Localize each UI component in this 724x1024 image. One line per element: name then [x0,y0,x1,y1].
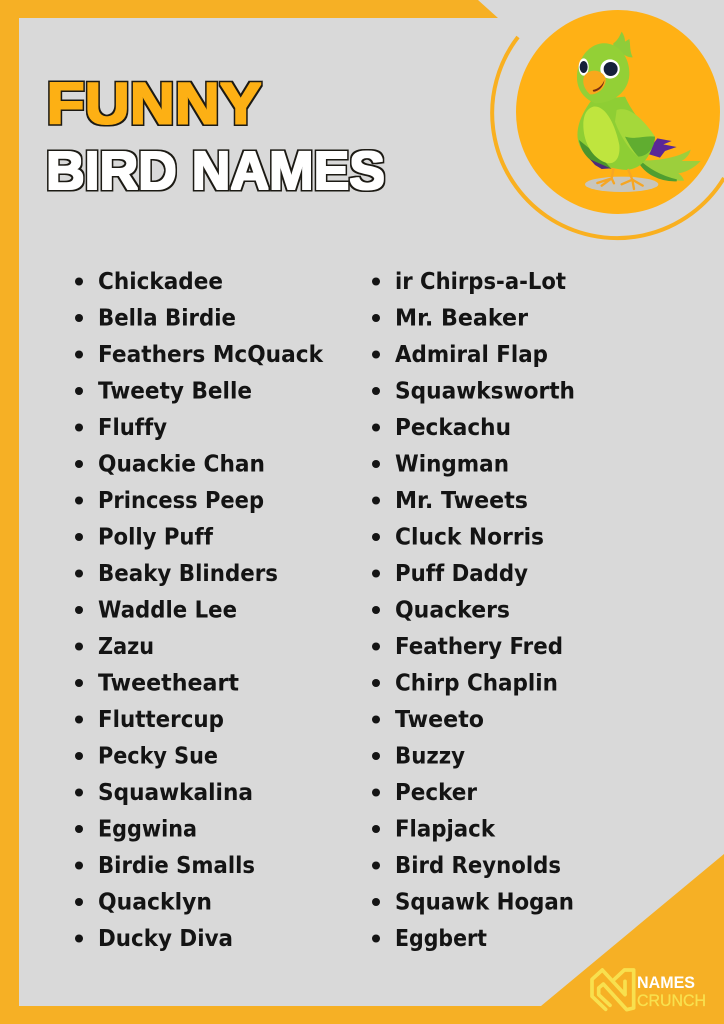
names: left column: Waddle Lee [98,598,237,624]
names: right column: Mr. Beaker [395,306,529,332]
names: right column: Cluck Norris [395,524,544,550]
names: right column: Pecker [395,780,478,806]
icon: N logo mark [592,970,634,1010]
names: right column: Squawksworth [395,378,575,404]
names: right column: Quackers [395,598,510,624]
title [46,72,385,201]
names: left column: Birdie Smalls [98,853,255,879]
bullets: left column [75,278,83,942]
right column of names [372,269,575,952]
title line: Funny: FUNNY [46,72,262,136]
names: right column: Peckachu [395,415,511,441]
names: left column: Tweetheart [98,670,239,696]
names: right column: Bird Reynolds [395,853,561,879]
names: right column: Mr. Tweets [395,488,528,514]
names: right column: Chirp Chaplin [395,670,558,696]
names: right column: ir Chirps-a-Lot [395,269,566,295]
title line: Bird Names: BIRD NAMES [46,141,385,201]
names: left column: Tweety Belle [98,378,252,404]
names: left column: Beaky Blinders [98,561,278,587]
names: left column: Ducky Diva [98,926,233,952]
names: left column: Polly Puff [98,524,214,550]
names: right column [395,269,575,952]
names: right column: Puff Daddy [395,561,528,587]
names: left column: Fluffy [98,415,167,441]
decorative ring arc [492,37,724,238]
names: right column: Admiral Flap [395,342,548,368]
logo text: Names: NAMES [637,973,695,992]
names: left column: Eggwina [98,816,197,842]
names: left column: Pecky Sue [98,744,218,770]
names: left column: Squawkalina [98,780,253,806]
names: left column: Bella Birdie [98,306,236,332]
logo: Names Crunch [592,970,706,1010]
names: right column: Wingman [395,452,509,478]
names: left column: Chickadee [98,269,223,295]
names: left column: Quacklyn [98,890,212,916]
names: left column: Fluttercup [98,707,224,733]
names: left column: Quackie Chan [98,452,265,478]
names: right column: Flapjack [395,816,496,842]
names: left column [98,269,324,952]
names: left column: Feathers McQuack [98,342,324,368]
orange circle behind bird [516,10,720,214]
names: left column: Princess Peep [98,488,264,514]
logo text: Crunch: CRUNCH [637,991,706,1010]
names: right column: Squawk Hogan [395,890,574,916]
names: right column: Feathery Fred [395,634,563,660]
names: right column: Eggbert [395,926,487,952]
left column of names [75,269,324,952]
names: right column: Buzzy [395,744,465,770]
bullets: right column [372,278,380,942]
names: right column: Tweeto [395,707,484,733]
names: left column: Zazu [98,634,154,660]
icon: green parrot [577,32,701,192]
